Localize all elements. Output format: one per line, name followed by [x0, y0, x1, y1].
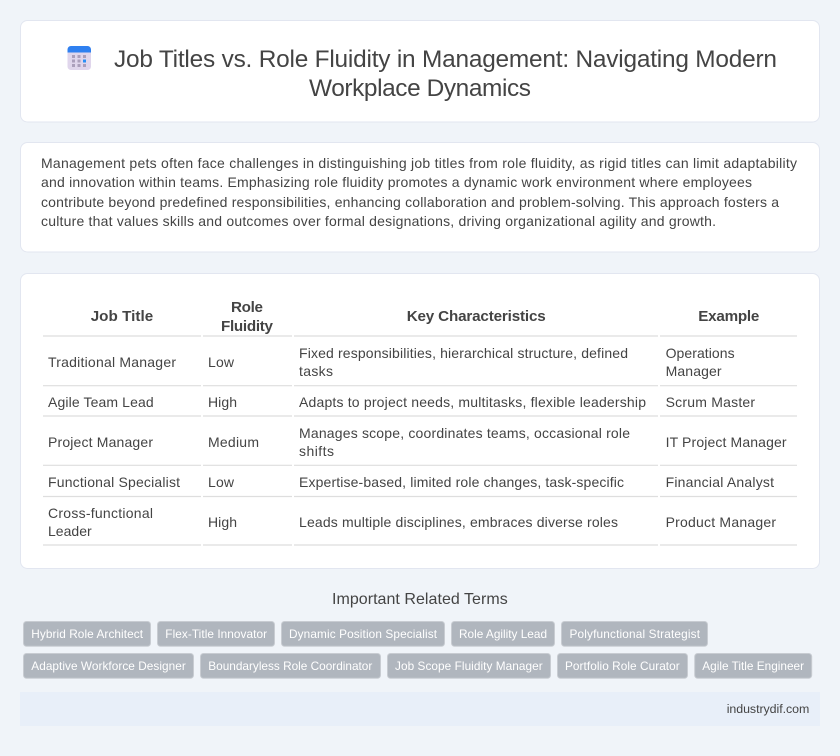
title: Workplace Dynamics [309, 75, 531, 102]
row: Project Manager: Project Manager [48, 434, 153, 450]
row: Functional Specialist: Financial Analyst [666, 474, 774, 490]
tags: related terms: Portfolio Role Curator [565, 659, 680, 673]
tags: related terms: Boundaryless Role Coordinator [208, 659, 372, 673]
row: Traditional Manager: Low [208, 354, 235, 370]
tags: related terms: Dynamic Position Specialist [289, 627, 438, 641]
row: Cross-functional Leader [48, 505, 776, 539]
row: Traditional Manager: Traditional Manager [48, 354, 176, 370]
footer: industrydif.com [727, 702, 809, 716]
row: Functional Specialist [48, 474, 774, 490]
row: Project Manager: Medium [208, 434, 259, 450]
row: Project Manager [48, 425, 787, 459]
panel: intro paragraph [20, 142, 820, 252]
row: Traditional Manager: Fixed responsibilities, hierarchical structure, defined [299, 345, 628, 361]
table header: Key Characteristics [407, 308, 546, 325]
title [114, 46, 777, 102]
heading: related terms: Important Related Terms [332, 591, 508, 608]
tags: related terms: Flex-Title Innovator [165, 627, 267, 641]
table header [91, 299, 759, 335]
tags: related terms: Hybrid Role Architect [31, 627, 144, 641]
tags: related terms [24, 622, 812, 678]
table header: Job Title [91, 308, 153, 325]
table header: Example [698, 308, 759, 325]
row: Project Manager: Manages scope, coordinates teams, occasional role [299, 425, 630, 441]
row: Agile Team Lead [48, 394, 755, 410]
row: Agile Team Lead: Scrum Master [666, 394, 755, 410]
row: Agile Team Lead: High [208, 394, 237, 410]
title: Job Titles vs. Role Fluidity in Management: Navigating Modern [114, 46, 777, 73]
panel: intro paragraph: and innovation within teams. Emphasizing role fluidity promotes a dynamic work environment where employees [41, 174, 752, 190]
row: Cross-functional Leader: Product Manager [666, 514, 776, 530]
panel: intro paragraph: Management pets often face challenges in distinguishing job titles from role fluidity, as rigid titles can limit adaptability [41, 155, 797, 171]
tags: related terms: Adaptive Workforce Designer [31, 659, 186, 673]
row: Traditional Manager: Operations [666, 345, 735, 361]
tags: related terms: Job Scope Fluidity Manager [395, 659, 543, 673]
table header: Fluidity [221, 318, 274, 335]
panel: intro paragraph: culture that values skills and outcomes over formal designations, driving organizational agility and growth. [41, 213, 716, 229]
row: Traditional Manager: tasks [299, 363, 333, 379]
icon: calendar [68, 46, 91, 70]
panel: comparison table [20, 274, 820, 568]
row: Cross-functional Leader: High [208, 514, 237, 530]
row: Project Manager: IT Project Manager [666, 434, 787, 450]
panel: title card [20, 20, 820, 122]
row: Traditional Manager: Manager [666, 363, 722, 379]
row: Cross-functional Leader: Leader [48, 523, 92, 539]
row: Agile Team Lead: Adapts to project needs, multitasks, flexible leadership [299, 394, 646, 410]
panel: intro paragraph: contribute beyond predefined responsibilities, enhancing collaboration and problem-solving. This approach fosters a [41, 194, 779, 210]
tags: related terms: Agile Title Engineer [702, 659, 804, 673]
row: Cross-functional Leader: Cross-functional [48, 505, 153, 521]
tags: related terms: Polyfunctional Strategist [570, 627, 701, 641]
row: Functional Specialist: Functional Specialist [48, 474, 180, 490]
row: Cross-functional Leader: Leads multiple disciplines, embraces diverse roles [299, 514, 618, 530]
tags: related terms: Role Agility Lead [459, 627, 547, 641]
row: Traditional Manager [48, 345, 735, 379]
row: Project Manager: shifts [299, 443, 334, 459]
footer [20, 692, 820, 726]
row: Functional Specialist: Low [208, 474, 235, 490]
row: Agile Team Lead: Agile Team Lead [48, 394, 154, 410]
row: Functional Specialist: Expertise-based, limited role changes, task-specific [299, 474, 624, 490]
table header: Role [231, 299, 263, 316]
